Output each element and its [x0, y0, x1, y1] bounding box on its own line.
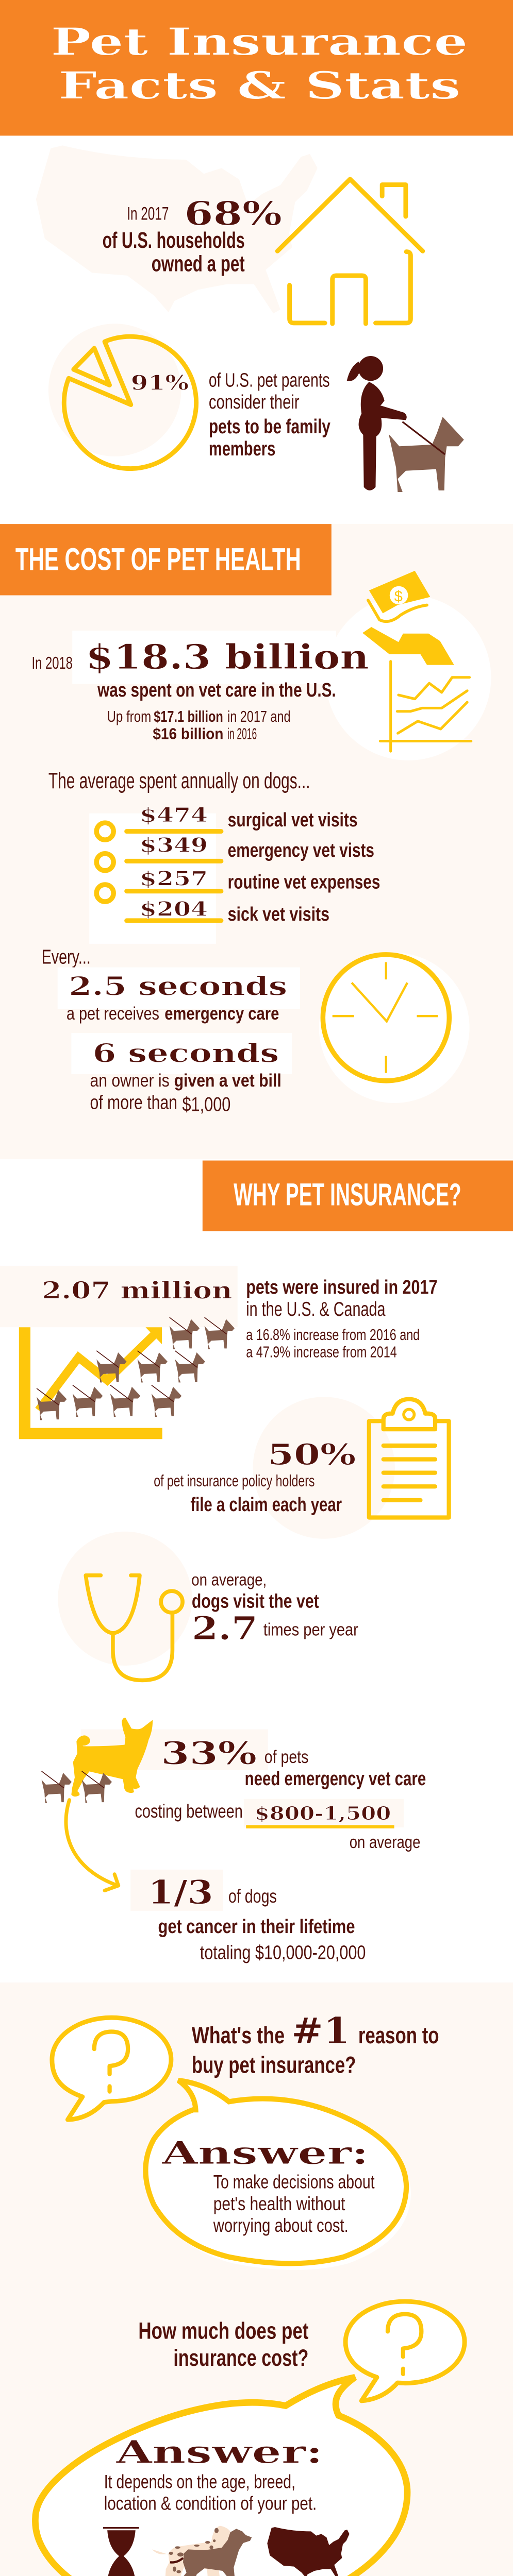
section header banner — [203, 1161, 513, 1231]
section heading: THE COST OF PET HEALTH — [15, 542, 301, 578]
text: emergency vet care: costing between — [135, 1801, 243, 1822]
icon: house — [277, 179, 423, 324]
stat: 50%: 50% — [268, 1438, 356, 1472]
icon: clock — [319, 953, 470, 1103]
speech bubble: question 2 — [345, 2301, 465, 2401]
text: dogs visit the vet — [191, 1570, 358, 1647]
text: emergency vet care: need emergency vet care — [245, 1768, 426, 1790]
text: average spent: The average spent annually on dogs... — [48, 769, 310, 793]
answer 1 text: pet's health without — [213, 2193, 345, 2214]
background panel: Q and A section — [0, 1982, 513, 2576]
white panel behind list — [89, 814, 216, 944]
list markers — [96, 823, 113, 902]
text: vet bill: of more than — [90, 1092, 177, 1113]
cream band — [0, 1266, 238, 1327]
stat: 1/3: 1/3 — [148, 1873, 213, 1911]
list: annual spend: $257 — [140, 867, 208, 890]
text: pets insured: a 47.9% increase from 2014 — [246, 1344, 397, 1361]
text: Every...: Every... — [42, 946, 91, 969]
speech bubble: answer 2 — [35, 2377, 407, 2576]
text: of U.S. households: of U.S. households — [103, 228, 245, 253]
icon: yellow chihuahua — [71, 1718, 153, 1797]
text: pets insured: a 16.8% increase from 2016 and — [246, 1326, 420, 1344]
background panel: cost section — [0, 524, 513, 1159]
title banner — [0, 0, 513, 135]
text: policy holders: of pet insurance policy holders — [154, 1471, 315, 1490]
text: a pet receives emergency care — [67, 1003, 279, 1024]
answer 1 text: worrying about cost. — [213, 2215, 349, 2236]
title line 1: Pet Insurance — [51, 20, 468, 64]
list: annual spend — [140, 803, 380, 925]
list: annual spend: surgical vet visits — [228, 809, 358, 831]
text: policy holders — [154, 1471, 342, 1516]
text: dogs visit the vet: on average, — [191, 1570, 267, 1589]
text: emergency vet care — [135, 1747, 426, 1822]
text: pet parents — [209, 370, 330, 460]
text: pet parents: members — [209, 437, 275, 460]
question 1 heading: #1 — [291, 2010, 350, 2052]
underline — [246, 1825, 394, 1828]
answer 1 text — [213, 2171, 375, 2236]
text: dogs visit the vet: 2.7 — [192, 1609, 258, 1647]
icon: pie chart — [64, 336, 196, 469]
question 2 heading — [138, 2317, 308, 2371]
answer 2 text: location & condition of your pet. — [104, 2493, 317, 2514]
cream panel behind cost — [244, 1799, 404, 1827]
stat: 33%: 33% — [161, 1735, 257, 1772]
text: vet bill — [90, 1070, 282, 1116]
text: emergency vet care: of pets — [264, 1747, 308, 1767]
text: was spent on vet care: was spent on vet care in the U.S. — [97, 680, 336, 701]
text: owned a pet: owned a pet — [152, 252, 245, 277]
text: prior years: Up from — [107, 708, 151, 725]
section: intro — [0, 0, 513, 492]
list underlines — [127, 832, 221, 921]
icon: clipboard — [369, 1399, 449, 1518]
question 2 heading: How much does pet — [138, 2317, 308, 2344]
text: pets insured — [246, 1277, 437, 1361]
icon: US map — [267, 2527, 350, 2576]
text: prior years: in 2016 — [227, 725, 257, 743]
text: a pet receives emergency care: emergency care — [164, 1003, 279, 1024]
icon group: dogs and US map — [152, 2526, 350, 2576]
question 1 heading: What's the — [192, 2022, 285, 2048]
text: prior years: in 2017 and — [227, 708, 290, 725]
stat: 2.07 million: 2.07 million — [42, 1276, 233, 1304]
stat: 91%: 91% — [131, 371, 189, 395]
icon: woman walking dog — [347, 356, 464, 492]
speech bubble: question 1 — [52, 2018, 171, 2120]
answer 1 text: To make decisions about — [213, 2171, 375, 2192]
cream panel behind 1/3 — [130, 1870, 223, 1911]
text: cancer — [158, 1886, 366, 1964]
icon: money, hand and chart: $ — [394, 589, 403, 605]
text: vet bill: an owner is — [90, 1070, 170, 1091]
text: In 2018: In 2018 — [32, 653, 73, 672]
white panel behind stat — [72, 631, 336, 684]
section: questions and answers — [35, 2018, 465, 2576]
chart: rising arrow — [19, 1327, 162, 1439]
text: prior years: $17.1 billion — [154, 708, 223, 725]
text: dogs visit the vet: dogs visit the vet — [192, 1591, 319, 1613]
stat: $18.3 billion: $18.3 billion — [86, 638, 369, 677]
answer 1 heading: Answer: — [161, 2135, 369, 2172]
background circle — [58, 1532, 192, 1666]
answer 2 text: It depends on the age, breed, — [104, 2471, 295, 2492]
question 1 heading — [192, 2010, 439, 2078]
stat: $800-1,500: $800-1,500 — [255, 1803, 391, 1824]
icon: dalmatian — [152, 2526, 230, 2576]
question 1 heading: buy pet insurance? — [192, 2052, 356, 2078]
text: vet bill: $1,000 — [182, 1093, 230, 1116]
section: vet visits and emergency — [58, 1532, 439, 2078]
text: cancer: get cancer in their lifetime — [158, 1916, 355, 1938]
text: prior years: $16 billion — [153, 725, 223, 743]
list: annual spend: routine vet expenses — [228, 872, 380, 893]
section header banner — [0, 524, 332, 595]
text: cancer: totaling $10,000-20,000 — [200, 1942, 366, 1964]
answer 2 text — [104, 2471, 317, 2514]
icon: stethoscope — [86, 1575, 183, 1680]
white panel behind 2.5 seconds — [58, 968, 300, 1009]
list: annual spend: $204 — [140, 897, 208, 920]
answer 2 heading: Answer: — [115, 2434, 323, 2471]
text: pet parents: consider their — [209, 392, 300, 413]
title line 2: Facts & Stats — [58, 64, 460, 108]
icon: hourglass — [103, 2527, 139, 2576]
text: cancer: of dogs — [228, 1886, 277, 1907]
text: on average: on average — [350, 1833, 420, 1852]
icon: brown dog — [179, 2529, 252, 2576]
stat: 2.5 seconds: 2.5 seconds — [69, 972, 287, 1002]
stat: 68%: 68% — [184, 194, 282, 233]
section: the cost of pet health — [0, 524, 491, 1103]
list: annual spend: $474 — [140, 803, 208, 826]
text: vet bill: given a vet bill — [174, 1070, 282, 1091]
list: annual spend: emergency vet vists — [228, 840, 374, 861]
white panel behind 6 seconds — [71, 1033, 292, 1074]
background circle — [48, 324, 181, 456]
text: prior years — [107, 708, 290, 743]
text: pets insured: in the U.S. & Canada — [246, 1298, 386, 1320]
text: a pet receives emergency care: a pet receives — [67, 1003, 159, 1024]
icon: money, hand and chart — [362, 571, 471, 751]
list: annual spend: $349 — [140, 834, 208, 857]
white circle behind chart — [325, 595, 491, 760]
arrow: curved yellow — [66, 1800, 119, 1890]
icon group: dogs — [37, 1317, 235, 1420]
background circle — [253, 1397, 395, 1539]
text: dogs visit the vet: times per year — [263, 1620, 358, 1640]
section: why pet insurance — [0, 1033, 513, 1539]
icon group: two dogs — [42, 1771, 112, 1803]
text: In 2017: In 2017 — [127, 203, 169, 224]
question 2 heading: insurance cost? — [173, 2345, 308, 2371]
text: pets insured: pets were insured in 2017 — [246, 1277, 437, 1298]
list: annual spend: sick vet visits — [228, 904, 329, 925]
stat: 6 seconds: 6 seconds — [93, 1039, 279, 1069]
question 1 heading: reason to — [358, 2022, 439, 2048]
speech bubble: answer 1 — [145, 2080, 411, 2270]
text: policy holders: file a claim each year — [190, 1494, 342, 1516]
cream panel behind 33% — [81, 1730, 268, 1770]
text: pet parents: of U.S. pet parents — [209, 370, 330, 392]
background US map — [36, 145, 318, 313]
text: pet parents: pets to be family — [209, 415, 330, 438]
